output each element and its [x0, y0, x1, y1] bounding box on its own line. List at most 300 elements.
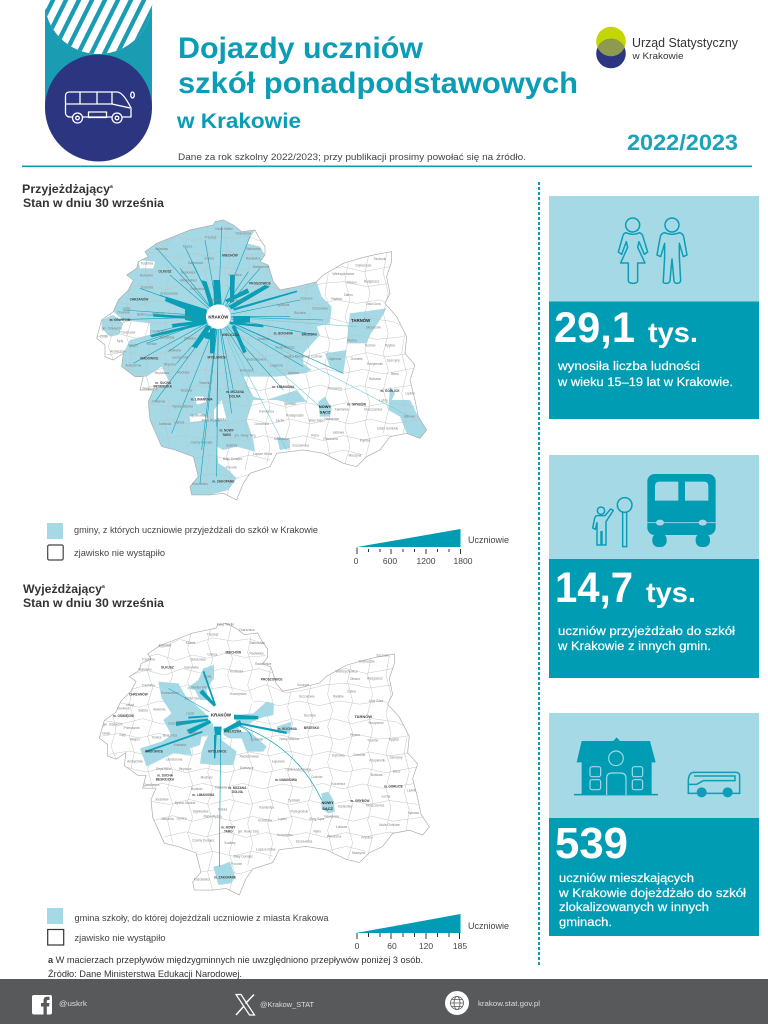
- gmina labels: Szczucin: [376, 654, 389, 658]
- gmina labels: Bobowa: [369, 377, 381, 381]
- gmina labels: Gromnik: [351, 357, 363, 361]
- gmina labels: Sękowa: [408, 811, 419, 815]
- gmina labels: Łabowa: [336, 825, 347, 829]
- gmina labels: Szaflary: [226, 444, 238, 448]
- gmina labels: MIECHÓW: [226, 650, 241, 655]
- gmina labels: Tomice: [152, 736, 162, 740]
- gmina labels: BRZESKO: [302, 332, 318, 336]
- gmina labels: Skawina: [187, 731, 200, 735]
- gmina labels: Sękowa: [404, 414, 415, 418]
- gmina labels: Szaflary: [224, 841, 236, 845]
- gmina labels: gm. Oświęcim: [103, 722, 123, 726]
- gmina labels: Charsznica: [239, 628, 255, 632]
- gmina labels: Łapsze Niżne: [256, 848, 276, 852]
- number: 539: [555, 819, 628, 868]
- legend: outbound map: [47, 908, 328, 945]
- gmina labels: Czernichów: [168, 722, 185, 726]
- gmina labels: m. ZAKOPANE: [214, 875, 236, 879]
- gmina labels: Dobczyce: [240, 766, 254, 770]
- icon: globe: [445, 991, 469, 1015]
- gmina labels: Poronin: [231, 862, 242, 866]
- gmina labels: Racławice: [249, 651, 264, 655]
- scale: outbound students: 120: [419, 941, 433, 951]
- gmina labels: Trzyciąż: [205, 235, 217, 239]
- gmina labels: Wietrzychowice: [332, 272, 355, 276]
- legend: inbound map: [47, 523, 318, 560]
- gmina labels: m. NOWY: [221, 825, 236, 829]
- gmina labels: Andrychów: [126, 364, 142, 368]
- gmina labels: Kalwaria: [174, 743, 186, 747]
- gmina labels: Wietrzychowice: [336, 670, 358, 674]
- gmina labels: Ochotnica: [258, 819, 272, 823]
- gmina labels: m. GORLICE: [384, 784, 403, 788]
- gmina labels: Podegrodzie: [290, 810, 308, 814]
- gmina labels: PROSZOWICE: [249, 282, 271, 286]
- gmina labels: Rzepiennik: [367, 362, 383, 366]
- gmina labels: Radgoszcz: [364, 280, 380, 284]
- gmina labels: Lisia Góra: [366, 302, 381, 306]
- gmina labels: Czarny Dunajec: [192, 839, 215, 843]
- heading: Przyjeżdżający: [22, 182, 164, 210]
- gmina labels: Wielka Wieś: [180, 278, 197, 282]
- gmina labels: Klucze: [183, 245, 193, 249]
- gmina labels: Lipnica Murowana: [284, 354, 310, 358]
- gmina labels: Radgoszcz: [367, 676, 383, 680]
- gmina labels: PROSZOWICE: [261, 678, 282, 682]
- gmina labels: Bochnia: [294, 311, 306, 315]
- scale: inbound students: 600: [383, 556, 397, 566]
- gmina labels: Kamienica: [259, 806, 274, 810]
- gmina labels: CHRZANÓW: [129, 691, 148, 696]
- gmina labels: Koszyce: [301, 296, 313, 300]
- gmina labels: TARNÓW: [351, 318, 371, 323]
- gmina labels: BRZESKO: [304, 726, 320, 730]
- gmina labels: m. MSZANA: [226, 390, 245, 394]
- heading: Przyjeżdżający: Stan w dniu 30 września: [23, 196, 164, 210]
- gmina labels: Wieprz: [130, 738, 140, 742]
- source note: Dane za rok szkolny 2022/2023; przy publikacji prosimy powołać się na źródło.: [178, 152, 526, 163]
- gmina labels: Trzyciąż: [207, 632, 219, 636]
- icon: Facebook: [32, 995, 52, 1014]
- gmina labels: Dąbrowa: [329, 357, 342, 361]
- description: w wieku 15–19 lat w Krakowie.: [557, 377, 733, 389]
- gmina labels: Krynica: [360, 439, 370, 443]
- gmina labels: TARNÓW: [354, 714, 372, 719]
- logo: [596, 27, 738, 68]
- gmina labels: Krościenko: [274, 437, 290, 441]
- gmina labels: Rzepiennik: [369, 759, 386, 763]
- gmina labels: Dąbrowa: [332, 754, 345, 758]
- gmina labels: Lipinki: [407, 788, 416, 792]
- gmina labels: Łabowa: [333, 430, 344, 434]
- legend: inbound map: zjawisko nie wystąpiło: [74, 548, 165, 558]
- gmina labels: DOLNA: [232, 790, 244, 794]
- gmina labels: Radłów: [333, 694, 344, 698]
- gmina labels: Łącko: [276, 419, 284, 423]
- gmina labels: m. LIMANOWA: [192, 793, 215, 797]
- title: szkół ponadpodstawowych: [178, 67, 578, 100]
- gmina labels: m. LIMANOWA: [191, 397, 213, 401]
- gmina labels: Alwernia: [152, 312, 165, 316]
- gmina labels: m. SUCHA: [155, 381, 172, 385]
- scale: outbound students: [355, 914, 509, 951]
- number: 14,7: [555, 564, 633, 612]
- gmina labels: Czchów: [311, 354, 323, 358]
- footer: krakow.stat.gov.pl: [478, 999, 540, 1008]
- gmina labels: MYŚLENICE: [207, 354, 226, 359]
- gmina labels: Chełmek: [117, 310, 130, 314]
- gmina labels: m. GRYBÓW: [350, 798, 369, 803]
- gmina labels: Trzebinia: [142, 684, 155, 688]
- heading: Wyjeżdżający: [23, 582, 164, 610]
- title: [176, 32, 578, 133]
- gmina labels: m. GORLICE: [380, 389, 399, 393]
- gmina labels: Iwanowice: [184, 665, 199, 669]
- gmina labels: Piwniczna: [327, 834, 341, 838]
- gmina labels: Babice: [137, 312, 147, 316]
- heading: Wyjeżdżający: Stan w dniu 30 września: [23, 596, 164, 610]
- gmina labels: Żabno: [344, 292, 353, 297]
- gmina labels: WADOWICE: [140, 356, 158, 360]
- gmina labels: Bystra-Sidzina: [172, 404, 193, 408]
- gmina labels: Ryglice: [389, 738, 399, 742]
- panel: population: [549, 196, 759, 419]
- gmina labels: Uście Gorlickie: [379, 823, 400, 827]
- gmina labels: Muszyna: [349, 454, 362, 458]
- gmina labels: Zembrzyce: [142, 387, 158, 391]
- gmina labels: Gręboszów: [355, 264, 372, 268]
- heading: Przyjeżdżający: Przyjeżdżający: [22, 182, 110, 196]
- gmina labels: Szczucin: [374, 257, 387, 261]
- gmina labels: TARG: [224, 829, 233, 833]
- gmina labels: Andrychów: [110, 350, 127, 354]
- gmina labels: Przeciszów: [119, 330, 136, 334]
- footer: @Krakow_STAT: [260, 1000, 314, 1009]
- gmina labels: Przeciszów: [124, 726, 140, 730]
- curved flow lines: [168, 688, 322, 867]
- gmina labels: Skała: [203, 674, 212, 678]
- gmina labels: Kęty: [117, 339, 124, 343]
- gmina labels: Olesno: [350, 677, 360, 681]
- gmina labels: Biecz: [393, 769, 401, 773]
- gmina labels: Liszki: [186, 712, 194, 716]
- gmina labels: Wielka Wieś: [191, 686, 209, 690]
- flow wedges: [150, 275, 297, 353]
- gmina labels: WADOWICE: [145, 750, 163, 754]
- gmina labels: Sułoszowa: [188, 261, 203, 265]
- gmina labels: KRAKÓW: [208, 315, 229, 320]
- footer: [0, 979, 768, 1024]
- gmina labels: gm. Nowy Targ: [234, 434, 256, 438]
- icon: school and bus: [574, 737, 740, 797]
- gmina labels: Stryszawa: [154, 371, 169, 375]
- gmina labels: KRAKÓW: [211, 713, 232, 718]
- gmina labels: Czernichów: [150, 330, 167, 334]
- gmina labels: Jabłonka: [161, 817, 174, 821]
- gmina labels: Stryszów: [164, 362, 177, 366]
- gmina labels: Kościelisko: [194, 878, 210, 882]
- gmina labels: Kocmyrzów: [230, 692, 247, 696]
- number: 29,1: [554, 304, 635, 352]
- gmina labels: Tuchów: [367, 738, 379, 742]
- gmina labels: Podegrodzie: [286, 414, 304, 418]
- icon: person at bus stop and bus: [593, 474, 716, 547]
- gmina labels: Racławice: [246, 256, 261, 260]
- gmina labels: Krzeszowice: [160, 292, 178, 296]
- gmina labels: Rabka: [218, 808, 227, 812]
- gmina labels: Wieprz: [128, 344, 139, 348]
- gmina labels: Tokarnia: [215, 785, 227, 789]
- gmina labels: Mucharz: [177, 370, 190, 374]
- gmina labels: Alwernia: [153, 708, 166, 712]
- gmina labels: Łużna: [382, 794, 391, 798]
- gmina labels: Tokarnia: [199, 381, 211, 385]
- gmina labels: Liszki: [184, 316, 193, 320]
- gmina labels: Gromnik: [353, 753, 366, 757]
- description: [557, 626, 736, 653]
- gmina labels: Brzeźnica: [163, 734, 177, 738]
- gmina labels: Krzeszowice: [161, 691, 179, 695]
- panel: inbound students: tys.: [646, 577, 696, 608]
- gmina labels: Lipinki: [405, 392, 415, 396]
- gmina labels: Nawojowa: [324, 417, 339, 421]
- scale: inbound students: Uczniowie: [468, 535, 509, 545]
- gmina labels: Babice: [138, 708, 148, 712]
- scale: outbound students: Uczniowie: [468, 921, 509, 931]
- gmina labels: gm. Nowy Targ: [238, 830, 259, 834]
- gmina labels: NOWY: [319, 404, 332, 409]
- gmina labels: Kamienica: [259, 409, 274, 413]
- gmina labels: Kamionka: [338, 804, 352, 808]
- gmina labels: Zabierzów: [190, 287, 205, 291]
- description: w Krakowie z innych gmin.: [557, 641, 711, 653]
- gmina labels: Skawina: [184, 336, 196, 340]
- gmina labels: SĄCZ: [322, 806, 334, 811]
- gmina labels: Skrzyszów: [366, 325, 382, 329]
- gmina labels: Stryszów: [179, 767, 192, 771]
- gmina labels: Klucze: [186, 641, 196, 645]
- gmina labels: m. ŁIMANOWA: [275, 778, 298, 782]
- gmina labels: m. NOWY: [219, 429, 235, 433]
- gmina labels: Brzeźnica: [160, 336, 174, 340]
- gmina labels: SĄCZ: [320, 409, 331, 414]
- gmina labels: Tymbark: [288, 799, 300, 803]
- footnote: a W macierzach przepływów międzygminnych nie uwzględniono przepływów poniżej 3 osób.: [48, 955, 423, 966]
- scale: inbound students: 1800: [454, 556, 473, 566]
- scale: inbound students: 0: [354, 556, 359, 566]
- source: Źródło: Dane Ministerstwa Edukacji Narodowej.: [48, 969, 242, 980]
- description: wynosiła liczba ludności: [557, 361, 700, 373]
- gmina labels: Piwniczna: [324, 437, 338, 441]
- gmina labels: NOWY: [321, 800, 334, 805]
- gmina labels: Kęty: [119, 733, 126, 737]
- gmina labels: Szerzyny: [389, 755, 403, 759]
- gmina labels: Chełmek: [117, 706, 130, 710]
- gmina labels: m. ŁIMANOWA: [272, 385, 295, 389]
- gmina labels: OLKUSZ: [159, 270, 172, 274]
- gmina labels: Sułoszowa: [190, 658, 206, 662]
- description: uczniów przyjeżdżało do szkół: [558, 626, 736, 638]
- gmina labels: Trzebinia: [140, 285, 153, 289]
- description: [557, 361, 733, 389]
- gmina labels: Szerzyny: [387, 359, 400, 363]
- gmina labels: Raba Wyżna: [204, 814, 222, 818]
- gmina labels: m. BOCHNIA: [278, 727, 298, 731]
- gmina labels: m. ZAKOPANE: [212, 480, 234, 484]
- heading: Wyjeżdżający: Wyjeżdżający: [23, 582, 102, 596]
- scale: inbound students: [354, 529, 509, 566]
- gmina labels: Osiek: [102, 731, 110, 735]
- gmina labels: Radziemice: [255, 662, 272, 666]
- gmina labels: Stryszawa: [156, 767, 171, 771]
- gmina labels: Radłów: [331, 297, 343, 301]
- legend: inbound map: gminy, z których uczniowie przyjeżdżali do szkół w Krakowie: [74, 525, 318, 535]
- gmina labels: Pleśna: [350, 733, 360, 737]
- gmina labels: Moszczenica: [366, 804, 384, 808]
- heading: Wyjeżdżający: a: [102, 584, 105, 590]
- gmina labels: Łużna: [379, 399, 388, 403]
- gmina labels: Krynica: [361, 836, 372, 840]
- gmina labels: Igołomia: [251, 738, 263, 742]
- logo: Urząd Statystyczny: [632, 35, 738, 50]
- panel: population: tys.: [648, 317, 698, 348]
- gmina labels: Lanckorona: [172, 355, 188, 359]
- gmina labels: Raciechowice: [247, 358, 267, 362]
- gmina labels: WIELICZKA: [224, 730, 242, 734]
- gmina labels: Łapsze Niżne: [253, 452, 272, 456]
- gmina labels: Kalwaria: [169, 349, 181, 353]
- gmina labels: Koniusza: [230, 670, 243, 674]
- gmina labels: Jabłonka: [159, 422, 172, 426]
- gmina labels: CHRZANÓW: [130, 297, 148, 302]
- description: [558, 873, 747, 929]
- gmina labels: MIECHÓW: [222, 253, 238, 258]
- gmina labels: Nowy Wiśnicz: [279, 737, 300, 741]
- heading: Przyjeżdżający: a: [110, 184, 113, 190]
- gmina labels: Charsznica: [235, 232, 251, 236]
- gmina labels: Bobowa: [371, 773, 383, 777]
- gmina labels: Łącko: [278, 817, 287, 821]
- gmina labels: Poronin: [226, 465, 237, 469]
- legend: outbound map: gmina szkoły, do której dojeżdżali uczniowie z miasta Krakowa: [74, 913, 328, 923]
- gmina labels: Korzenna: [328, 386, 342, 390]
- gmina labels: Koszyce: [297, 683, 310, 687]
- gmina labels: BESKIDZKA: [156, 778, 175, 782]
- scale: outbound students: 0: [355, 941, 360, 951]
- gmina labels: Zielonki: [210, 298, 221, 302]
- icon: X: [236, 994, 254, 1015]
- gmina labels: Budzów: [181, 389, 193, 393]
- title: Dojazdy uczniów: [178, 32, 424, 65]
- gmina labels: Łapanów: [272, 759, 285, 763]
- gmina labels: Tymbark: [284, 402, 296, 406]
- description: zlokalizowanych w innych: [559, 902, 709, 914]
- gmina labels: Biały Dunajec: [223, 457, 243, 461]
- gmina labels: m. SUCHA: [157, 774, 174, 778]
- gmina labels: Lipnica Murowana: [285, 768, 311, 772]
- gmina labels: Rytro: [314, 830, 321, 834]
- icon: bus: [66, 92, 134, 123]
- gmina labels: Dobczyce: [240, 369, 254, 373]
- gmina labels: Ochotnica: [255, 422, 269, 426]
- gmina labels: [100, 227, 415, 486]
- description: uczniów mieszkających: [559, 873, 694, 885]
- gmina labels: Bystra-Sidzina: [175, 801, 195, 805]
- gmina labels: Ryglice: [385, 344, 395, 348]
- gmina labels: Uście Gorlickie: [377, 426, 398, 430]
- gmina labels: Libiąż: [123, 306, 131, 310]
- gmina labels: Libiąż: [126, 703, 135, 707]
- gmina labels: Koniusza: [228, 273, 242, 277]
- gmina labels: Iwanowice: [181, 270, 196, 274]
- gmina labels: Trzebinia: [142, 658, 155, 662]
- gmina labels: Tuchów: [365, 344, 376, 348]
- gmina labels: DOLNA: [229, 394, 241, 398]
- legend: outbound map: zjawisko nie wystąpiło: [74, 933, 166, 943]
- gmina labels: Bolesław: [159, 644, 172, 648]
- gmina labels: Książ Wielki: [215, 227, 233, 231]
- gmina labels: Nowy Wiśnicz: [275, 345, 295, 349]
- gmina labels: Kamionka: [335, 408, 349, 412]
- gmina labels: Rytro: [311, 434, 319, 438]
- gmina labels: Osiek: [100, 335, 108, 339]
- map: inbound flows: [97, 220, 427, 500]
- logo: w Krakowie: [631, 51, 684, 62]
- scale: outbound students: 185: [453, 941, 467, 951]
- gmina labels: Korzenna: [332, 782, 345, 786]
- gmina labels: Skrzyszów: [368, 721, 384, 725]
- gmina labels: Krościenko: [277, 833, 293, 837]
- gmina labels: Bochnia: [304, 714, 316, 718]
- gmina labels: OLKUSZ: [161, 666, 174, 670]
- gmina labels: Jordanów: [155, 798, 169, 802]
- gmina labels: Drwinia: [258, 337, 269, 341]
- Kraków centre: [206, 304, 231, 329]
- header: decorative badge with bus icon: [45, 0, 152, 162]
- icon: woman and man: [618, 218, 687, 283]
- gmina labels: Gołcza: [204, 256, 214, 260]
- gmina labels: Szczawnica: [292, 444, 309, 448]
- gmina labels: Trzebinia: [140, 262, 153, 266]
- map: outbound flows: [99, 623, 429, 895]
- scale: outbound students: 60: [387, 941, 397, 951]
- gmina labels: Czarny Dunajec: [190, 440, 213, 444]
- gmina labels: Igołomia: [277, 303, 290, 307]
- gmina labels: Żabno: [347, 689, 356, 694]
- gmina labels: Słaboszów: [250, 641, 266, 645]
- gmina labels: Bukowno: [139, 668, 152, 672]
- gmina labels: Muszyna: [352, 851, 365, 855]
- gmina labels: Lanckorona: [166, 758, 182, 762]
- gmina labels: Stary Sącz: [309, 817, 325, 821]
- gmina labels: WIELICZKA: [222, 333, 240, 337]
- gmina labels: Kocmyrzów: [228, 299, 246, 303]
- gmina labels: BESKIDZKA: [153, 384, 173, 388]
- gmina labels: Zabierzów: [184, 696, 200, 700]
- gminas shaded: [102, 220, 427, 495]
- scale: inbound students: 1200: [417, 556, 436, 566]
- gmina labels: Iwkowa: [288, 371, 299, 375]
- title: w Krakowie: [176, 110, 301, 133]
- gmina labels: Biecz: [391, 372, 399, 376]
- gmina labels: m. BOCHNIA: [274, 332, 294, 336]
- gmina labels: Książ Wielki: [217, 623, 234, 627]
- footer: @uskrk: [59, 999, 87, 1008]
- flow wedges: [145, 671, 287, 758]
- description: w Krakowie dojeżdżało do szkół: [558, 888, 747, 900]
- gmina labels: Pleśna: [347, 339, 357, 343]
- gmina labels: Kościelisko: [192, 482, 208, 486]
